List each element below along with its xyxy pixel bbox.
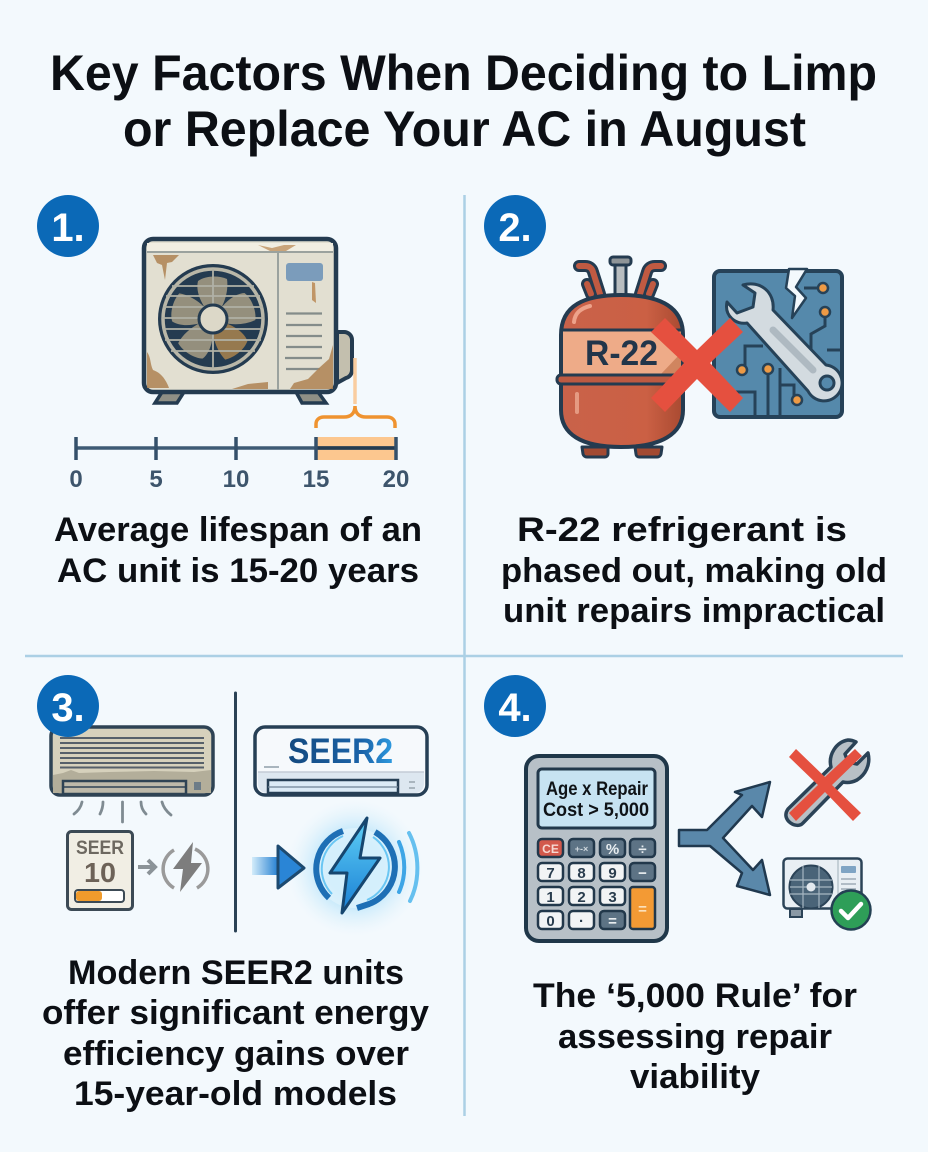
caption 3: offer significant energy xyxy=(42,994,429,1032)
panel: SEER2 efficiency xyxy=(37,675,429,1113)
icon: calculator: = xyxy=(638,901,647,918)
icon: calculator: ÷ xyxy=(638,841,647,858)
icon: calculator xyxy=(526,756,667,941)
panel: lifespan xyxy=(37,195,422,590)
panel: R-22 refrigerant xyxy=(484,195,887,630)
icon: circuit board with wrench xyxy=(714,269,842,417)
icon: SEER 10 label: SEER xyxy=(76,838,124,859)
icon: modern SEER2 wall unit: SEER2 xyxy=(288,732,393,771)
icon: calculator: 1 xyxy=(546,889,555,906)
panel: 5,000 rule xyxy=(484,675,870,1096)
title: or Replace Your AC in August xyxy=(123,101,806,157)
icon: blue arrow xyxy=(252,846,304,888)
number badge 1: 1. xyxy=(51,206,85,250)
number badge 2: 2. xyxy=(498,206,532,250)
icon: crossed-out wrench xyxy=(786,740,869,825)
icon: calculator: 7 xyxy=(546,865,555,882)
icon: glowing energy bolt xyxy=(287,800,423,936)
caption 1 xyxy=(54,511,422,590)
number badge 2 xyxy=(484,195,546,257)
caption 4: assessing repair xyxy=(558,1018,832,1056)
icon: SEER 10 label xyxy=(68,832,132,910)
icon: calculator: CE xyxy=(542,842,559,856)
number badge 1 xyxy=(37,195,99,257)
icon: calculator: Cost > 5,000 xyxy=(543,800,649,821)
icon: calculator: 9 xyxy=(608,865,617,882)
icon: weak energy symbol xyxy=(138,842,208,892)
icon: red cross xyxy=(651,318,743,412)
icon: calculator: Age x Repair xyxy=(546,779,649,800)
caption 3: efficiency gains over xyxy=(63,1035,409,1073)
caption 3 xyxy=(42,954,429,1113)
number badge 3: 3. xyxy=(51,686,85,730)
caption 4 xyxy=(533,977,857,1096)
number badge 4: 4. xyxy=(498,686,532,730)
icon: branching arrows xyxy=(679,782,770,895)
icon: calculator: · xyxy=(579,913,584,930)
icon: calculator: 3 xyxy=(608,889,617,906)
caption 3: 15-year-old models xyxy=(74,1075,397,1113)
number badge 4 xyxy=(484,675,546,737)
icon: calculator: = xyxy=(608,913,617,930)
icon: calculator: − xyxy=(638,865,647,882)
caption 3: Modern SEER2 units xyxy=(68,954,404,992)
icon: modern SEER2 wall unit xyxy=(255,727,427,795)
timeline 0 to 20 years: 10 xyxy=(223,466,249,493)
icon: calculator: % xyxy=(606,841,619,858)
timeline 0 to 20 years: 5 xyxy=(149,466,163,493)
timeline 0 to 20 years: 20 xyxy=(383,466,409,493)
caption 2 xyxy=(501,511,887,630)
icon: new AC unit with check xyxy=(784,858,870,930)
timeline 0 to 20 years xyxy=(69,358,409,493)
caption 4: The ‘5,000 Rule’ for xyxy=(533,977,857,1015)
title xyxy=(50,45,877,157)
icon: rusty outdoor AC unit xyxy=(144,239,352,403)
caption 2: unit repairs impractical xyxy=(503,592,885,630)
caption 1: Average lifespan of an xyxy=(54,511,422,549)
icon: calculator: 0 xyxy=(546,913,555,930)
icon: calculator: +-× xyxy=(575,844,588,854)
caption 1: AC unit is 15-20 years xyxy=(57,552,419,590)
icon: SEER 10 label: 10 xyxy=(84,857,116,888)
icon: old wall AC unit xyxy=(51,727,213,795)
icon: weak airflow lines xyxy=(74,802,171,822)
icon: R-22 refrigerant tank: R-22 xyxy=(585,334,658,373)
number badge 3 xyxy=(37,675,99,737)
icon: calculator: 2 xyxy=(577,889,586,906)
title: Key Factors When Deciding to Limp xyxy=(50,45,877,101)
caption 2: phased out, making old xyxy=(501,552,887,590)
icon: R-22 refrigerant tank xyxy=(557,257,685,457)
icon: calculator: 8 xyxy=(577,865,586,882)
timeline 0 to 20 years: 15 xyxy=(303,466,329,493)
caption 4: viability xyxy=(630,1058,760,1096)
caption 2: R-22 refrigerant is xyxy=(517,511,847,549)
timeline 0 to 20 years: 0 xyxy=(69,466,83,493)
